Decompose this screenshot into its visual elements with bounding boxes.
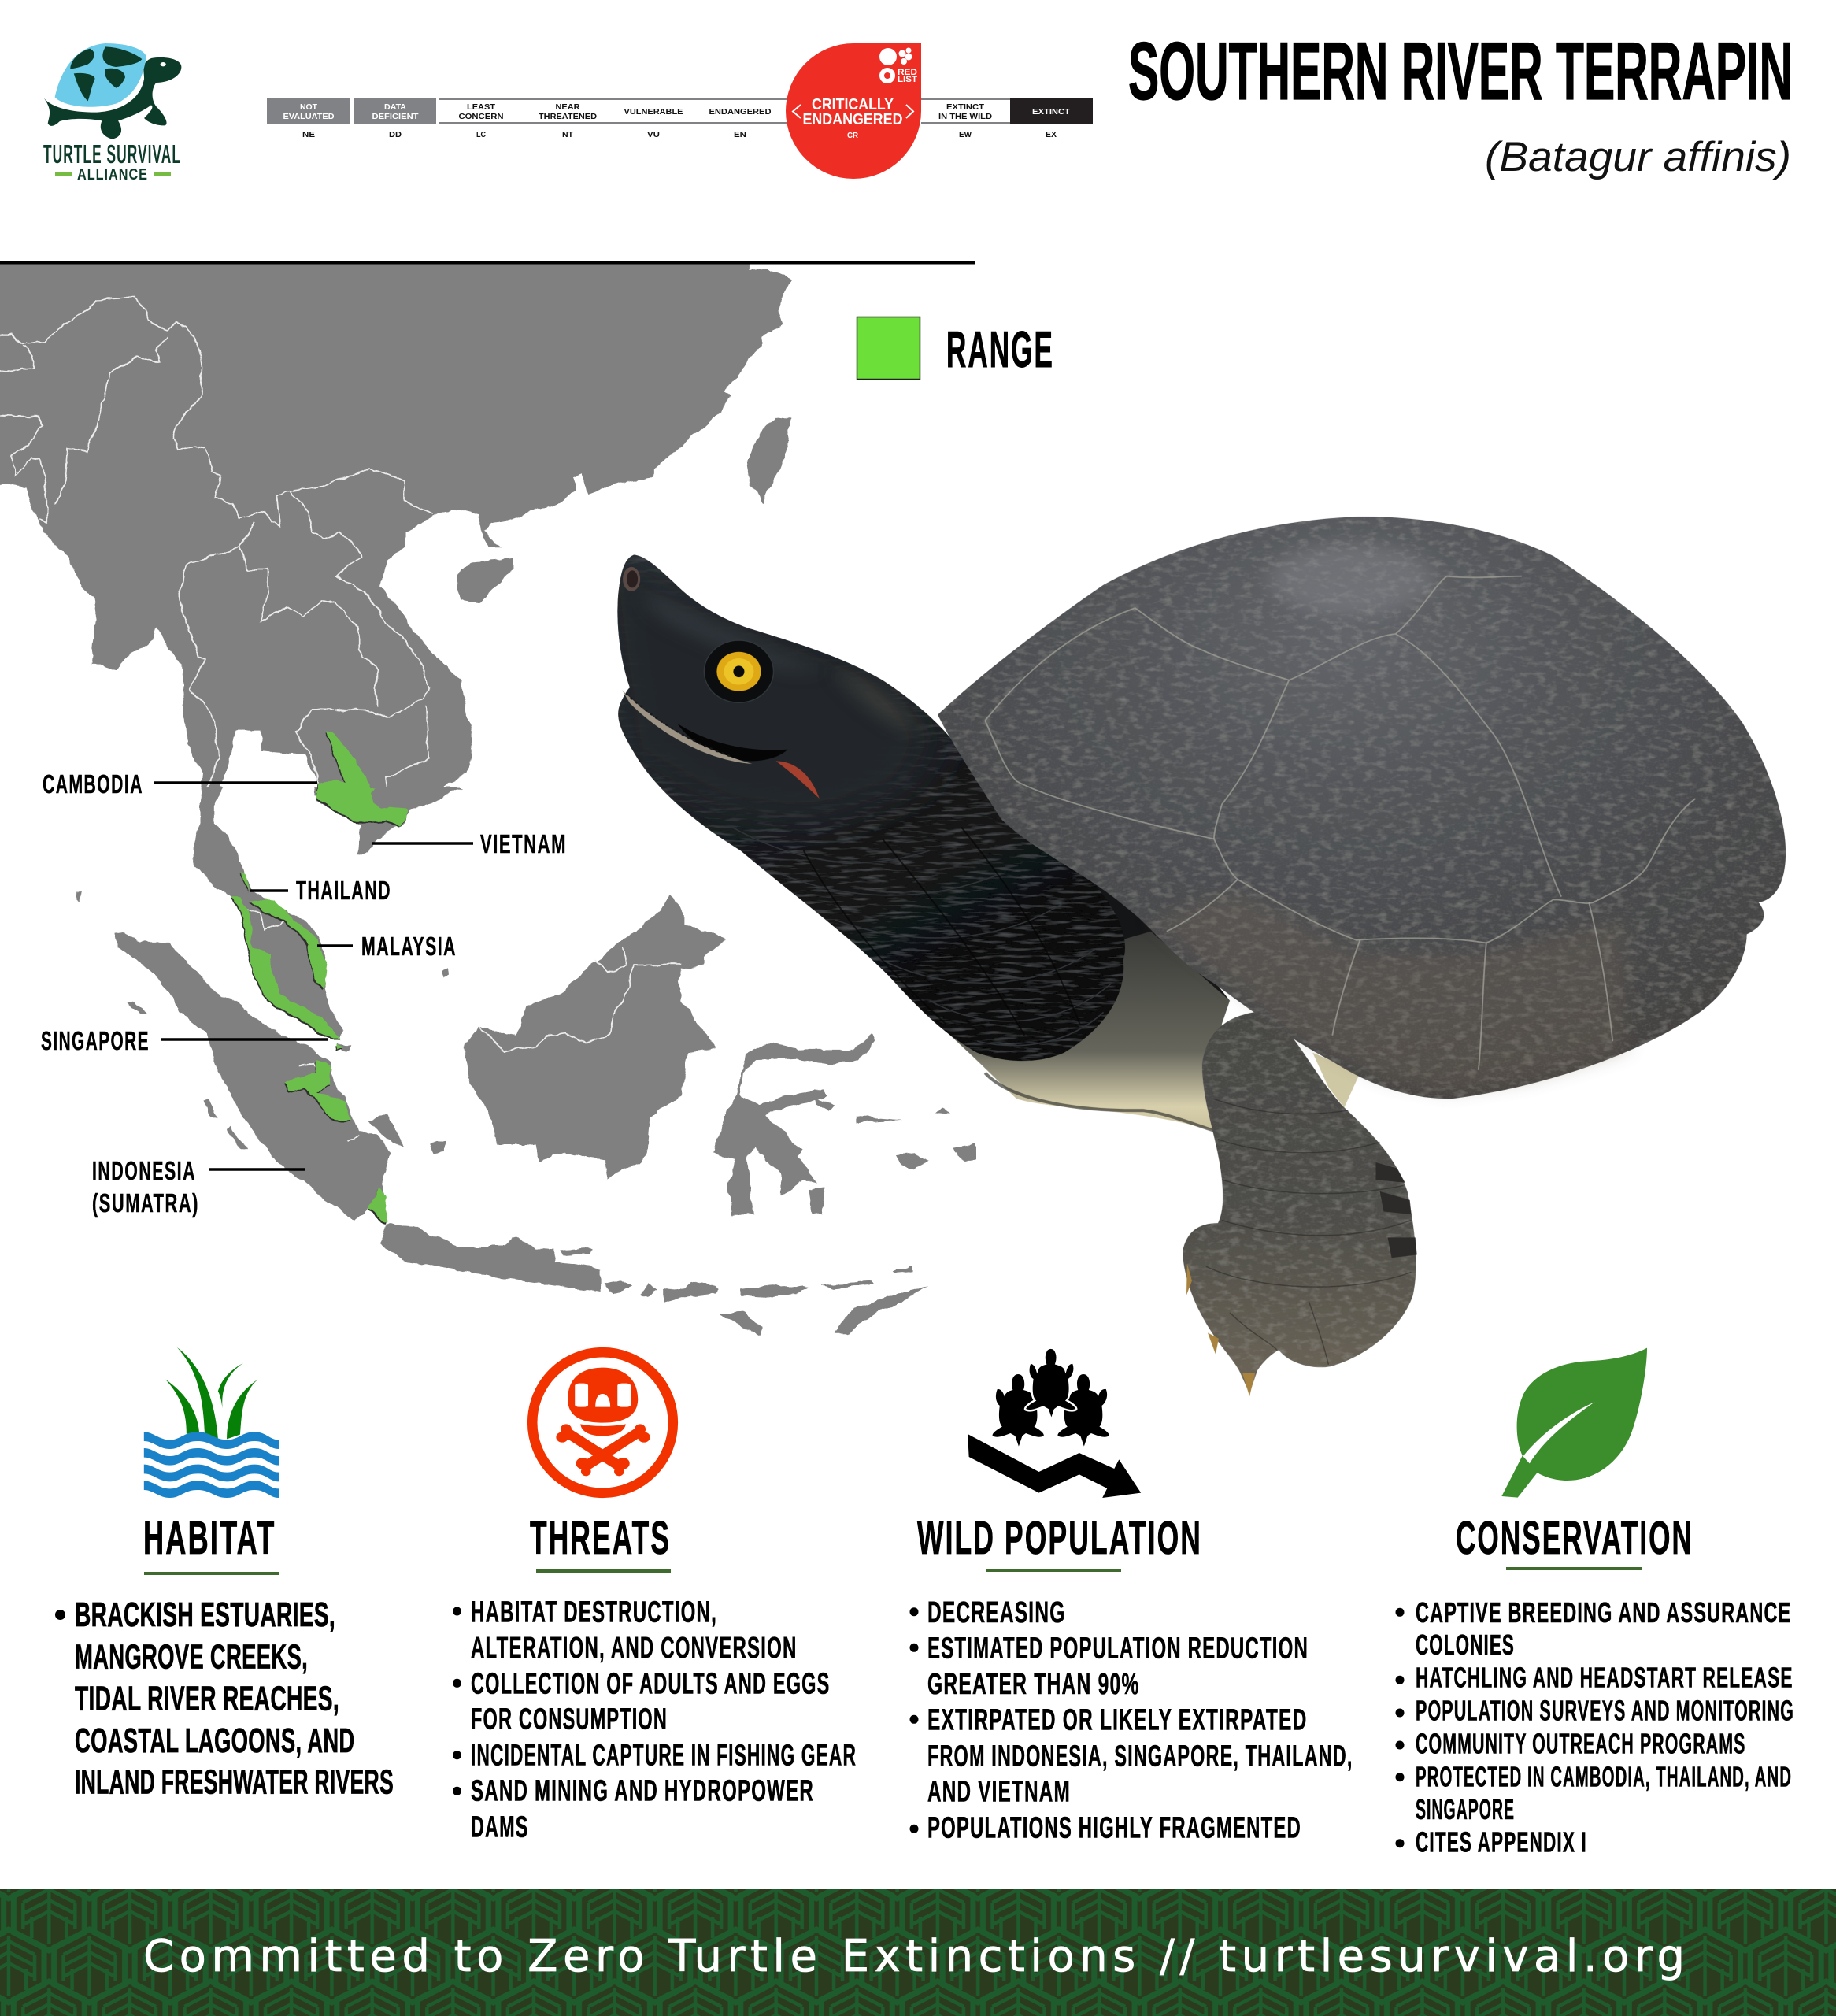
status: not evaluated (267, 98, 350, 139)
wild population list: EXTIRPATED OR LIKELY EXTIRPATED (927, 1704, 1307, 1737)
logo wordmark bottom: ALLIANCE (77, 166, 148, 183)
range map (0, 254, 976, 1333)
threats list (453, 1595, 857, 1844)
legend: range: RANGE (946, 321, 1054, 378)
status: extinct in the wild: EXTINCT (946, 102, 985, 112)
head sheen (617, 554, 953, 833)
wild population list: DECREASING (927, 1596, 1066, 1629)
label: Thailand: THAILAND (296, 876, 391, 905)
plastron (938, 932, 1360, 1131)
footer tagline: Committed to Zero Turtle Extinctions // turtlesurvival.org (143, 1931, 1685, 1982)
label: Indonesia (Sumatra): (SUMATRA) (92, 1188, 199, 1217)
threats list: SAND MINING AND HYDROPOWER (471, 1775, 814, 1808)
icon: grass and water (144, 1347, 279, 1498)
status: least concern to endangered band: NEAR (556, 102, 580, 112)
conservation list (1395, 1596, 1794, 1858)
conservation list: COLONIES (1416, 1629, 1515, 1661)
wild population list: POPULATIONS HIGHLY FRAGMENTED (927, 1811, 1301, 1844)
panel: conservation (1395, 1348, 1794, 1858)
IUCN red list status scale (267, 43, 1093, 179)
head and neck (583, 539, 1125, 1061)
status: data deficient (354, 98, 436, 139)
carapace (938, 517, 1786, 1099)
habitat list (55, 1596, 394, 1802)
carapace lower band (1151, 891, 1624, 1093)
subtitle: scientific name: (Batagur affinis) (1485, 134, 1791, 180)
icon: red list mark (879, 47, 917, 84)
heading: threats: THREATS (530, 1512, 671, 1564)
icon: turtles over declining arrow (968, 1348, 1141, 1498)
status: extinct: EXTINCT (1032, 107, 1071, 117)
habitat list: COASTAL LAGOONS, AND (75, 1722, 354, 1760)
neck folds (732, 828, 1112, 1046)
conservation list: CITES APPENDIX I (1416, 1826, 1587, 1858)
threats list: INCIDENTAL CAPTURE IN FISHING GEAR (471, 1739, 857, 1772)
label: Singapore: SINGAPORE (41, 1026, 150, 1055)
map: southeast asia islands (76, 788, 976, 1333)
status: least concern to endangered band: EN (734, 130, 746, 139)
icon: red list mark: RED (898, 68, 917, 77)
status: critically endangered badge: CR (847, 131, 858, 140)
status: data deficient: DD (389, 130, 402, 139)
threats list: DAMS (471, 1810, 529, 1844)
map: green species range (231, 732, 408, 1223)
status: critically endangered badge: CRITICALLY (812, 96, 894, 113)
nostril (623, 567, 640, 591)
label: Indonesia (Sumatra) (92, 1156, 305, 1217)
status: least concern to endangered band: VU (647, 130, 660, 139)
panel: threats (453, 1352, 857, 1844)
label: Malaysia: MALAYSIA (361, 932, 457, 961)
habitat list: MANGROVE CREEKS, (75, 1638, 308, 1676)
status: data deficient: DATA (384, 102, 406, 112)
status: least concern to endangered band: ENDANGERED (709, 107, 772, 117)
legend: range (857, 317, 1054, 380)
habitat list: TIDAL RIVER REACHES, (75, 1681, 339, 1718)
status: critically endangered badge: ENDANGERED (803, 111, 902, 128)
status: not evaluated: EVALUATED (283, 112, 335, 121)
status: least concern to endangered band: THREATENED (539, 112, 597, 121)
wild population list: ESTIMATED POPULATION REDUCTION (927, 1632, 1309, 1666)
status: least concern to endangered band: LC (476, 130, 486, 139)
heading: habitat: HABITAT (143, 1512, 276, 1564)
status: not evaluated: NOT (300, 102, 318, 112)
front leg and foot (1183, 1012, 1417, 1396)
neck shadow backing (993, 804, 1230, 1024)
footer banner (0, 1889, 1836, 2016)
wild population list: GREATER THAN 90% (927, 1668, 1140, 1701)
wild population list: FROM INDONESIA, SINGAPORE, THAILAND, (927, 1740, 1353, 1773)
southern river terrapin illustration (583, 517, 1786, 1396)
status: extinct: EX (1046, 130, 1057, 139)
logo wordmark top: TURTLE SURVIVAL (43, 139, 181, 169)
wild population list (910, 1596, 1353, 1844)
panel: habitat (55, 1347, 394, 1802)
icon: skull and crossbones (532, 1352, 673, 1493)
status: data deficient: DEFICIENT (372, 112, 419, 121)
map: mainland asia (0, 254, 794, 803)
wild population list: AND VIETNAM (927, 1776, 1071, 1809)
status: extinct in the wild: EW (959, 130, 972, 139)
conservation list: SINGAPORE (1416, 1793, 1515, 1825)
panel: wild population (910, 1348, 1353, 1844)
habitat list: INLAND FRESHWATER RIVERS (75, 1764, 394, 1802)
status: least concern to endangered band: CONCERN (458, 112, 504, 121)
logo: Turtle Survival Alliance (43, 43, 181, 183)
icon: leaf (1501, 1348, 1647, 1498)
status: least concern to endangered band: NT (562, 130, 574, 139)
status: least concern to endangered band (439, 98, 787, 139)
status: extinct in the wild (921, 98, 1010, 139)
eye (704, 640, 774, 702)
status: not evaluated: NE (302, 130, 315, 139)
status: extinct (1010, 98, 1093, 139)
status: critically endangered badge (786, 43, 921, 179)
threats list: COLLECTION OF ADULTS AND EGGS (471, 1667, 830, 1700)
label: Cambodia: CAMBODIA (43, 769, 143, 799)
status: least concern to endangered band: VULNERABLE (624, 107, 683, 117)
scute lines (985, 721, 1695, 943)
map: land and range (0, 254, 976, 1333)
threats list: FOR CONSUMPTION (471, 1703, 668, 1736)
label: Indonesia (Sumatra): INDONESIA (92, 1156, 196, 1185)
heading: wild population: WILD POPULATION (917, 1512, 1202, 1564)
threats list: ALTERATION, AND CONVERSION (471, 1632, 797, 1665)
status: extinct in the wild: IN THE WILD (938, 112, 992, 121)
status: least concern to endangered band: LEAST (467, 102, 496, 112)
label: Vietnam: VIETNAM (480, 829, 567, 858)
icon: globe turtle (43, 43, 181, 139)
threats list: HABITAT DESTRUCTION, (471, 1595, 717, 1629)
gape and teeth (677, 724, 788, 761)
icon: red list mark: LIST (898, 75, 917, 84)
habitat list: BRACKISH ESTUARIES, (75, 1596, 335, 1634)
